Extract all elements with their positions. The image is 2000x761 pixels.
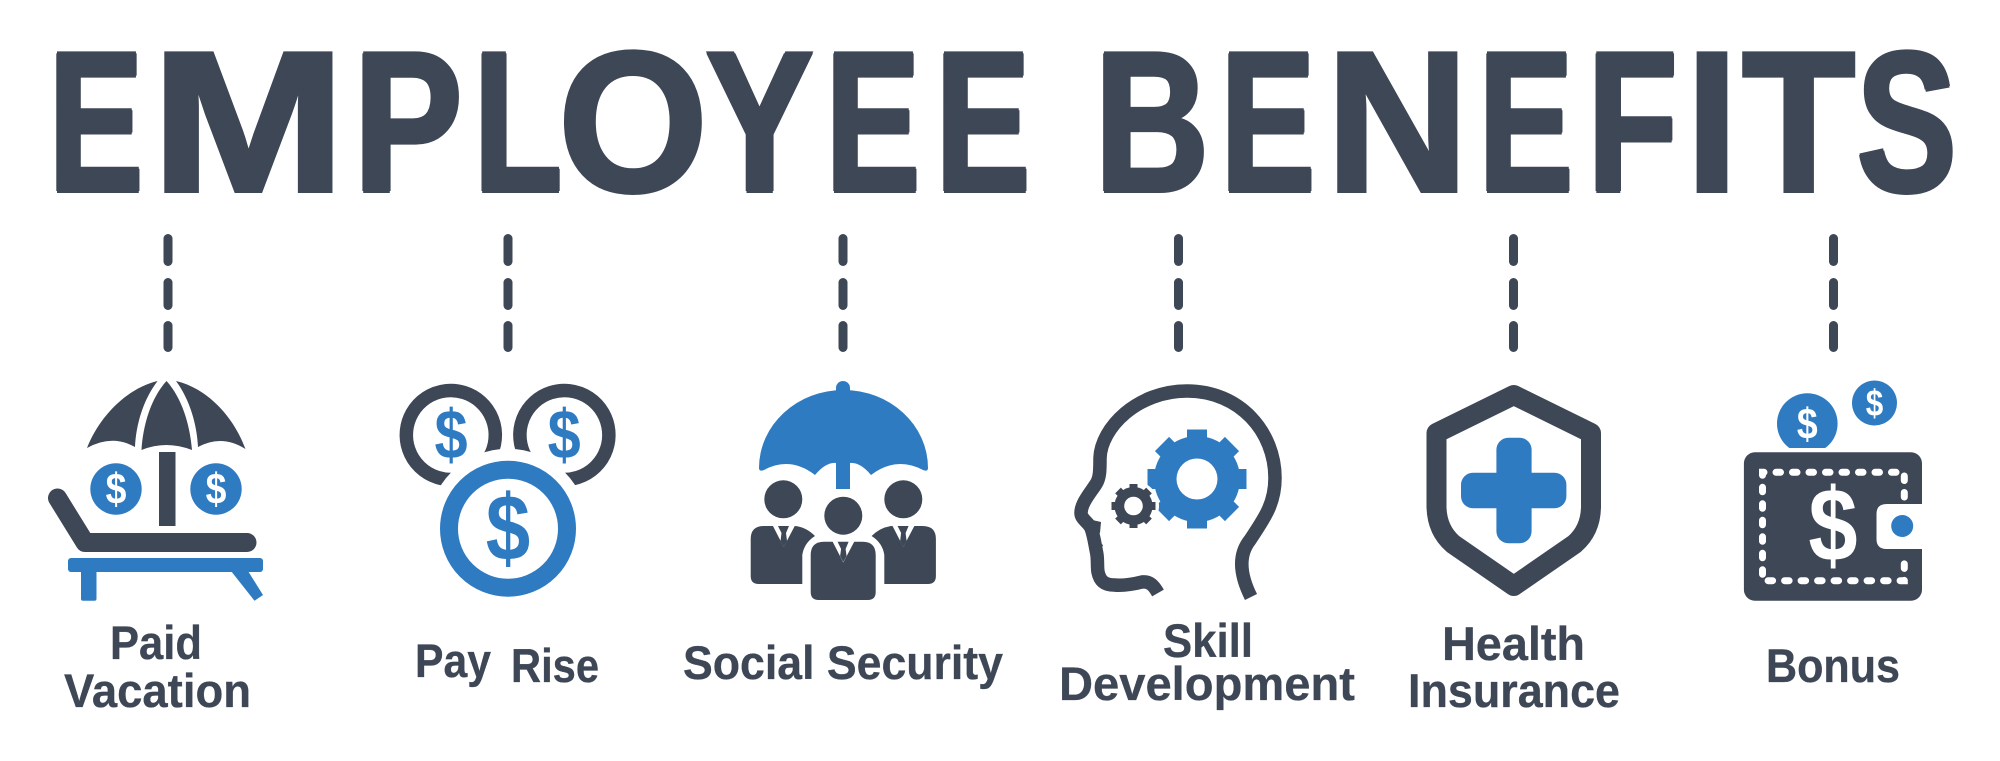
title: B: [1095, 11, 1209, 234]
title: N: [1326, 11, 1468, 234]
label: skill development: [1059, 614, 1355, 710]
panel: social security: [683, 234, 1003, 689]
title: P: [354, 11, 462, 234]
label: bonus: Bonus: [1766, 639, 1900, 692]
panel: skill development: [1059, 234, 1355, 710]
label: pay rise: [415, 634, 599, 692]
label: health insurance: [1408, 617, 1620, 717]
connector: dashed line: [1829, 234, 1838, 352]
label: pay rise: Pay: [415, 634, 491, 687]
icon: three coins: $: [486, 476, 530, 580]
connector: dashed line: [1174, 234, 1183, 352]
title: L: [474, 11, 562, 234]
title: [49, 11, 1956, 234]
icon: three coins: $: [548, 395, 581, 474]
connector: dashed line: [838, 234, 848, 352]
icon: three coins: $: [434, 395, 468, 474]
label: pay rise: Rise: [511, 639, 599, 692]
panel: health insurance: [1408, 234, 1620, 717]
icon: three coins: [406, 391, 609, 609]
connector: dashed line: [164, 234, 172, 352]
title: E: [826, 11, 920, 234]
label: skill development: Development: [1059, 657, 1355, 710]
panel: bonus: [1744, 234, 1930, 692]
icon: beach umbrella, lounger and coins: [58, 381, 263, 601]
title: T: [1742, 11, 1855, 234]
icon: beach umbrella, lounger and coins: $: [206, 464, 227, 514]
connector: dashed line: [1509, 234, 1518, 352]
title: Y: [706, 11, 813, 234]
icon: umbrella over three people: [751, 381, 936, 600]
panel: pay rise: [406, 234, 609, 692]
title: O: [558, 11, 708, 234]
label: health insurance: Health: [1442, 617, 1585, 670]
label: health insurance: Insurance: [1408, 664, 1620, 717]
icon: wallet with coins: $: [1808, 468, 1858, 584]
title: E: [1221, 11, 1315, 234]
title: M: [151, 11, 345, 234]
title: E: [1479, 11, 1573, 234]
label: social security: Social Security: [683, 636, 1003, 689]
title: I: [1686, 11, 1738, 234]
icon: wallet with coins: [1744, 380, 1930, 601]
label: paid vacation: Paid: [110, 616, 202, 669]
icon: shield with cross: [1436, 395, 1591, 586]
panel: paid vacation: [58, 234, 263, 717]
label: paid vacation: Vacation: [64, 664, 251, 717]
label: skill development: Skill: [1163, 614, 1253, 667]
icon: wallet with coins: $: [1866, 383, 1883, 424]
icon: head with gears: [1081, 391, 1275, 597]
title: S: [1857, 11, 1956, 234]
icon: wallet with coins: $: [1797, 399, 1818, 449]
connector: dashed line: [504, 234, 512, 352]
title: F: [1588, 11, 1677, 234]
label: paid vacation: [64, 616, 251, 717]
title: E: [936, 11, 1030, 234]
title: E: [49, 11, 143, 234]
icon: beach umbrella, lounger and coins: $: [106, 464, 127, 514]
